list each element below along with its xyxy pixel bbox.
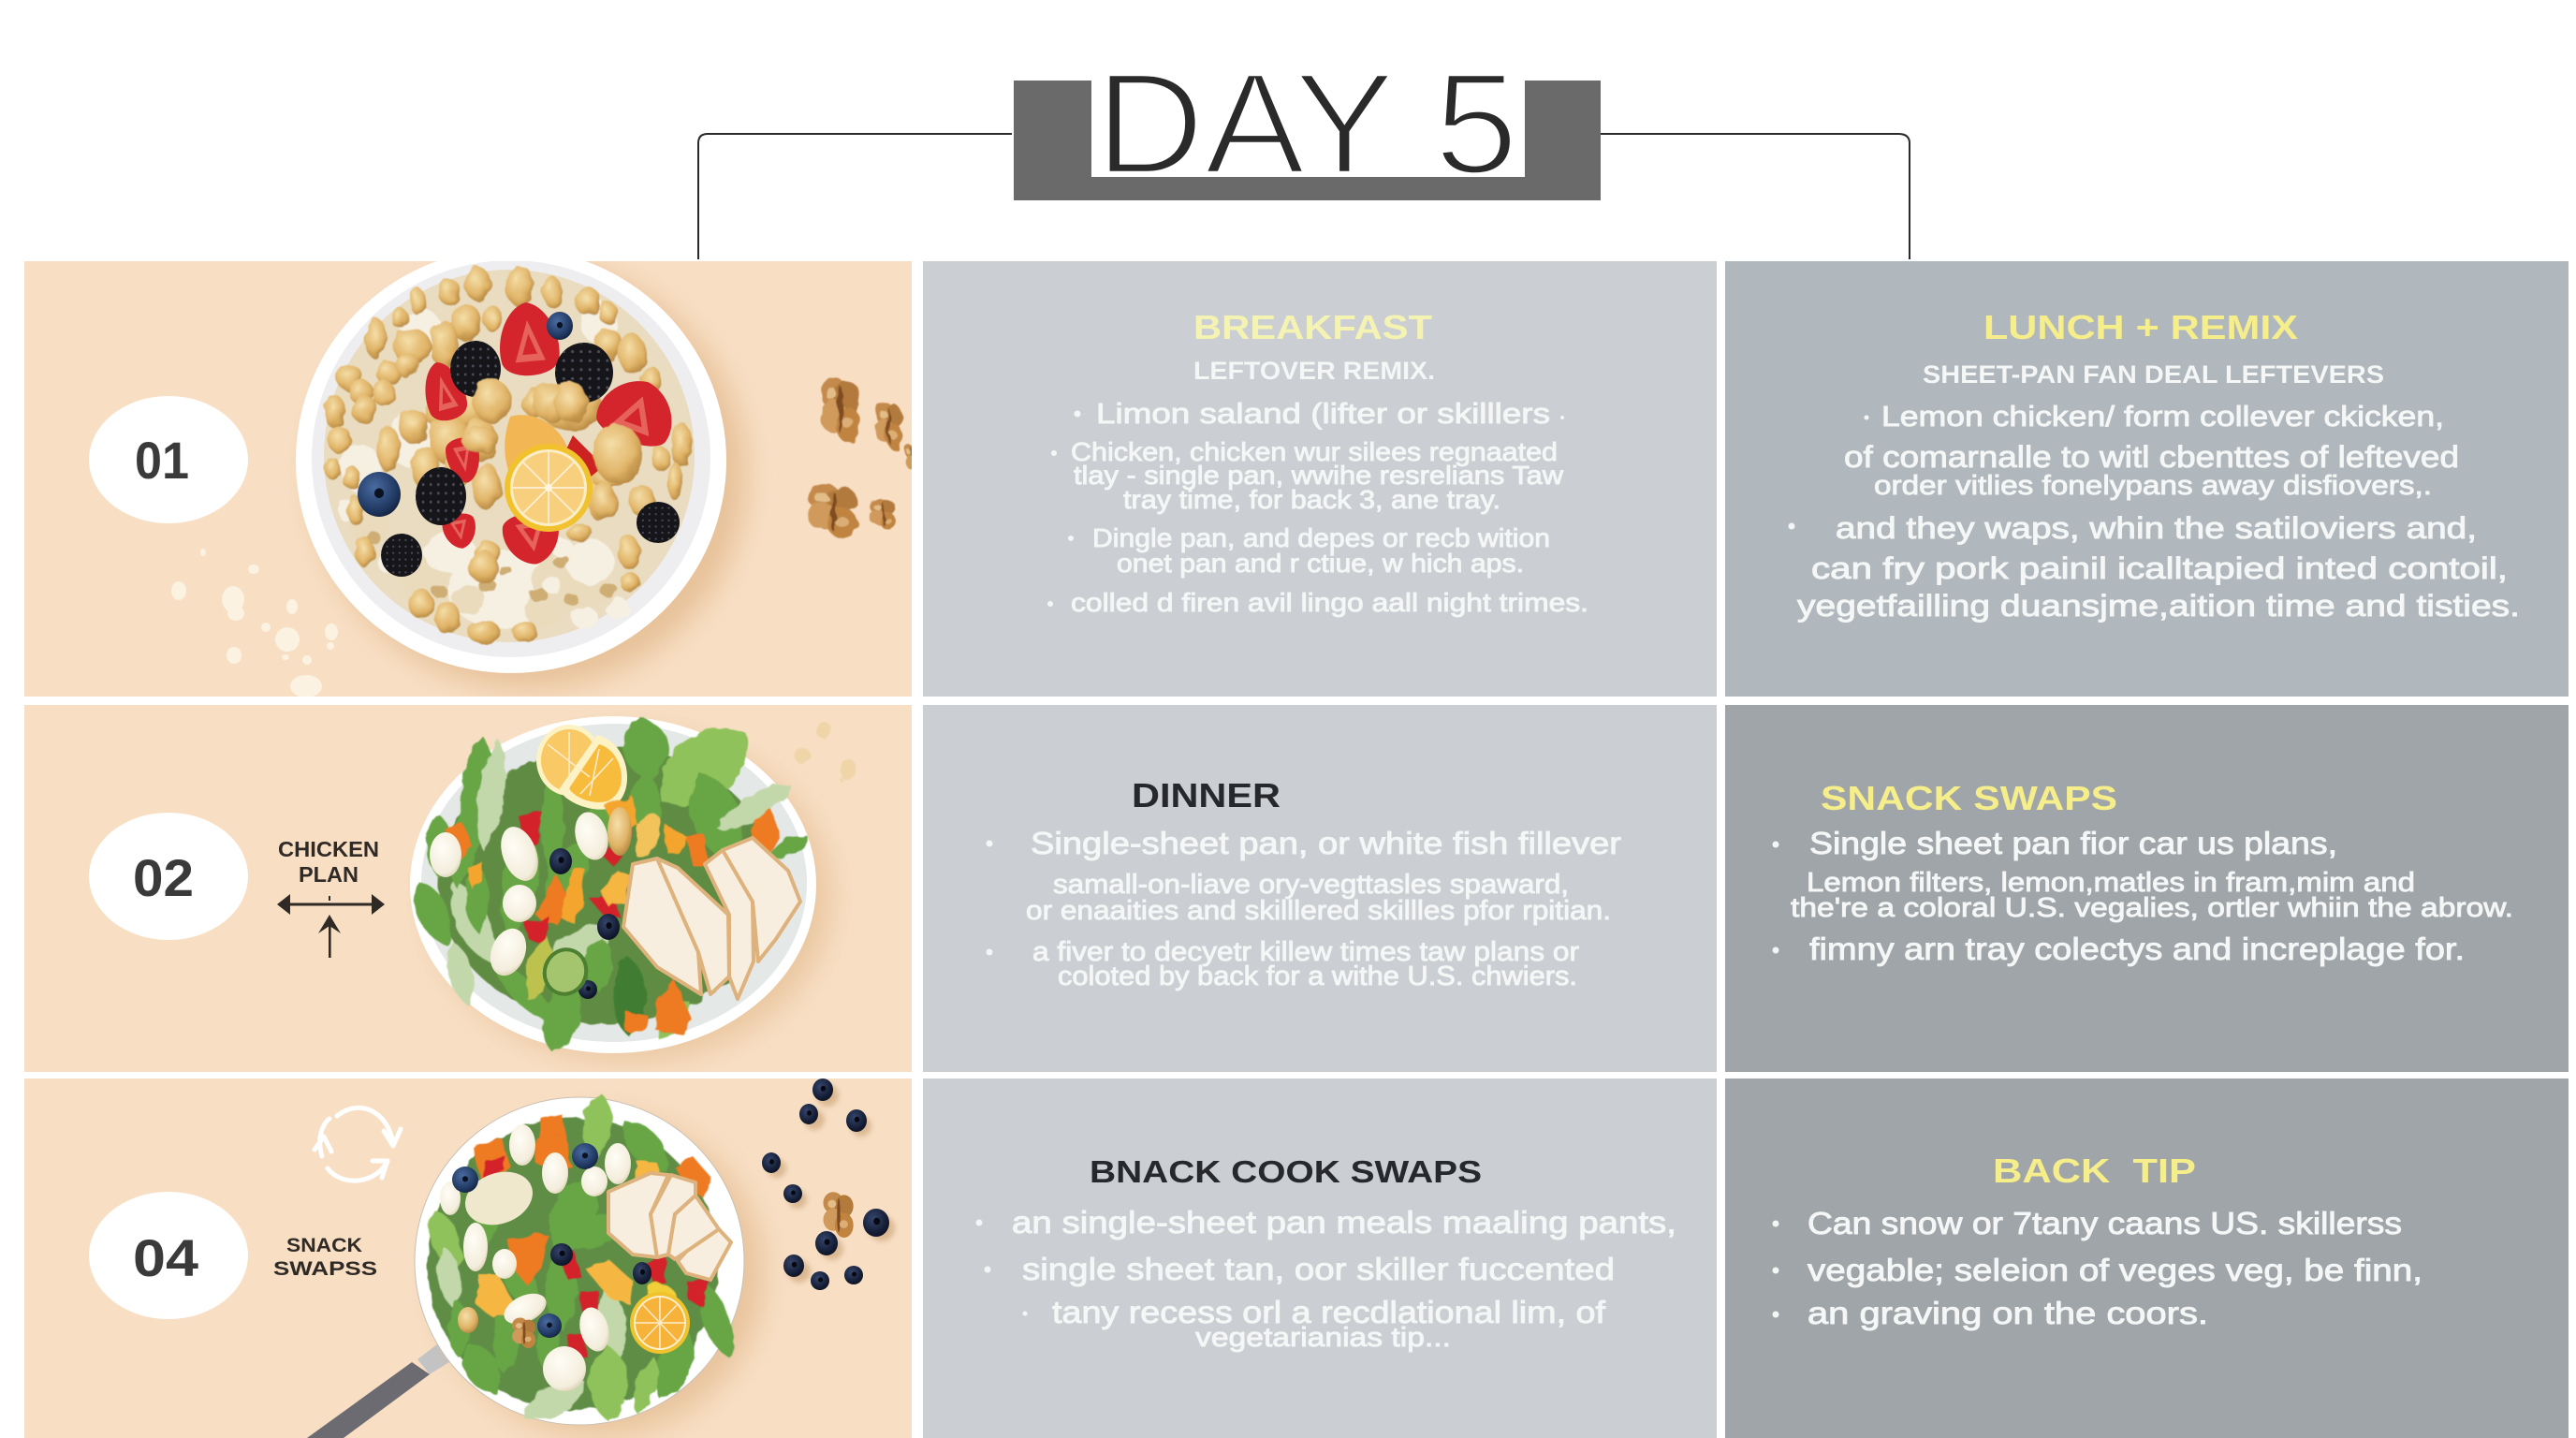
cook swaps body text: single sheet tan, oor skiller fuccented [1022, 1252, 1615, 1286]
walnuts [807, 377, 918, 537]
back tip body text: vegable; seleion of veges veg, be finn, [1808, 1253, 2422, 1287]
icon: white cycle arrows [315, 1108, 401, 1181]
white beans and banana slice [440, 1124, 631, 1391]
cook swaps body text: tany recess orl a recdlational lim, of [1052, 1295, 1606, 1329]
breakfast body text: Dingle pan, and depes or recb wition [1092, 523, 1550, 552]
heading: breakfast: BREAKFAST [1193, 308, 1432, 346]
label: chicken plan: CHICKEN [278, 837, 379, 861]
number badge 02: 02 [133, 848, 194, 907]
breakfast body text: Limon saland (lifter or skilllers [1096, 397, 1550, 430]
title: DAY 5 [1014, 43, 1601, 204]
back tip body text [1773, 1206, 2422, 1330]
dinner body text: Single-sheet pan, or white fish fillever [1031, 826, 1621, 860]
lemon halves [536, 725, 627, 810]
right connector line [1600, 134, 1910, 259]
dinner body text [987, 826, 1621, 991]
oat flakes scatter [171, 549, 338, 697]
lunch body text: order vitlies fonelypans away disfiovers,. [1874, 471, 2432, 501]
number badge 01 [89, 396, 248, 523]
snack body text: Single sheet pan fior car us plans, [1809, 826, 2337, 860]
lunch body text [1788, 400, 2520, 623]
label: snack swapss: SWAPSS [273, 1258, 377, 1280]
blackberries [381, 341, 680, 577]
cook swaps body text [975, 1205, 1676, 1353]
panel: row 3 food [24, 1078, 912, 1438]
blueberries [358, 312, 573, 517]
cook swaps body text: vegetarianias tip... [1195, 1323, 1451, 1353]
vegetables [444, 796, 780, 1034]
left connector line [698, 134, 1012, 259]
bowl of salad with chicken and pan [415, 1093, 764, 1436]
number badge 04 [89, 1192, 248, 1319]
lunch body text: and they waps, whin the satiloviers and, [1836, 511, 2477, 545]
heading: back tip: BACK TIP [1993, 1152, 2196, 1190]
breakfast body text: colled d firen avil lingo aall night trimes. [1071, 588, 1588, 617]
label: snack swapss: SNACK [286, 1235, 362, 1256]
panel: bnack cook swaps [923, 1078, 1717, 1438]
panel: row 1 food [24, 248, 918, 697]
crumbs [796, 722, 856, 782]
grilled chicken slices [623, 838, 800, 999]
title: DAY 5: DAY 5 [1095, 43, 1518, 204]
breakfast body text: tray time, for back 3, ane tray. [1123, 485, 1500, 514]
dinner body text: a fiver to decyetr killew times taw plans or [1032, 937, 1579, 967]
snack body text: the're a coloral U.S. vegalies, ortler whiin the abrow. [1791, 893, 2513, 923]
heading: dinner: DINNER [1132, 776, 1281, 814]
lunch body text: yegetfailling duansjme,aition time and tisties. [1797, 589, 2520, 623]
panel: lunch remix [1725, 261, 2569, 697]
breakfast body text: onet pan and r ctiue, w hich aps. [1117, 549, 1524, 578]
strawberries [417, 300, 683, 569]
subheading: sheet-pan: SHEET-PAN FAN DEAL LEFTEVERS [1923, 360, 2384, 389]
chicken slices [608, 1173, 731, 1280]
back tip body text: an graving on the coors. [1808, 1296, 2208, 1330]
panel: back tip [1725, 1078, 2569, 1438]
subheading: leftover remix: LEFTOVER REMIX. [1193, 357, 1435, 385]
lunch body text: of comarnalle to witl cbenttes of lefteved [1844, 440, 2459, 474]
number badge 01: 01 [135, 431, 189, 490]
snack body text [1773, 826, 2513, 966]
label: chicken plan [279, 842, 378, 882]
panel: row 2 food [24, 705, 912, 1072]
dinner body text: samall-on-liave ory-vegttasles spaward, [1053, 870, 1569, 900]
number badge 04: 04 [133, 1228, 198, 1287]
icon: double arrow with up arrow [277, 894, 385, 958]
label: snack swapss [273, 1235, 377, 1280]
heading: snack swaps: SNACK SWAPS [1821, 779, 2117, 817]
olives [549, 848, 620, 999]
oats and nuts [325, 265, 692, 643]
heading: lunch + remix: LUNCH + REMIX [1983, 308, 2298, 346]
top nuts over fruit [461, 378, 642, 520]
snack body text: fimny arn tray colectys and increplage for. [1809, 932, 2465, 966]
leaves [421, 1093, 742, 1430]
breakfast body text: tlay - single pan, wwihe resrelians Taw [1074, 461, 1564, 490]
salad leaves [403, 708, 812, 1057]
breakfast body text [1047, 397, 1588, 617]
lemon slice [505, 444, 593, 532]
label: chicken plan: PLAN [299, 862, 359, 887]
snack body text: Lemon filters, lemon,matles in fram,mim and [1807, 868, 2415, 898]
pan handle [307, 1344, 449, 1438]
cucumber slices [543, 947, 588, 996]
back tip body text: Can snow or 7tany caans US. skillerss [1808, 1206, 2402, 1240]
vegetables [473, 1114, 711, 1357]
lemon slice [630, 1292, 690, 1354]
number badge 02 [89, 813, 248, 940]
breakfast body text: Chicken, chicken wur silees regnaated [1071, 437, 1558, 466]
panel: dinner [923, 705, 1717, 1072]
orange chunk [505, 415, 567, 470]
blueberries scatter [762, 1078, 895, 1290]
dinner body text: or enaaities and skilllered skillles pfor rpitian. [1026, 896, 1611, 926]
lunch body text: can fry pork painil icalltapied inted contoil, [1811, 551, 2508, 585]
cook swaps body text: an single-sheet pan meals maaling pants, [1012, 1205, 1676, 1240]
heading: bnack cook swaps: BNACK COOK SWAPS [1090, 1154, 1482, 1189]
blueberries in bowl [452, 1143, 651, 1348]
lunch body text: Lemon chicken/ form collever ckicken, [1881, 400, 2444, 433]
dinner body text: coloted by back for a withe U.S. chwiers. [1058, 961, 1577, 991]
bowl of salad with chicken [403, 708, 831, 1062]
white beans [430, 807, 632, 981]
panel: snack swaps [1725, 705, 2569, 1072]
bowl of oatmeal with berries [296, 248, 746, 689]
panel: breakfast [923, 261, 1717, 697]
